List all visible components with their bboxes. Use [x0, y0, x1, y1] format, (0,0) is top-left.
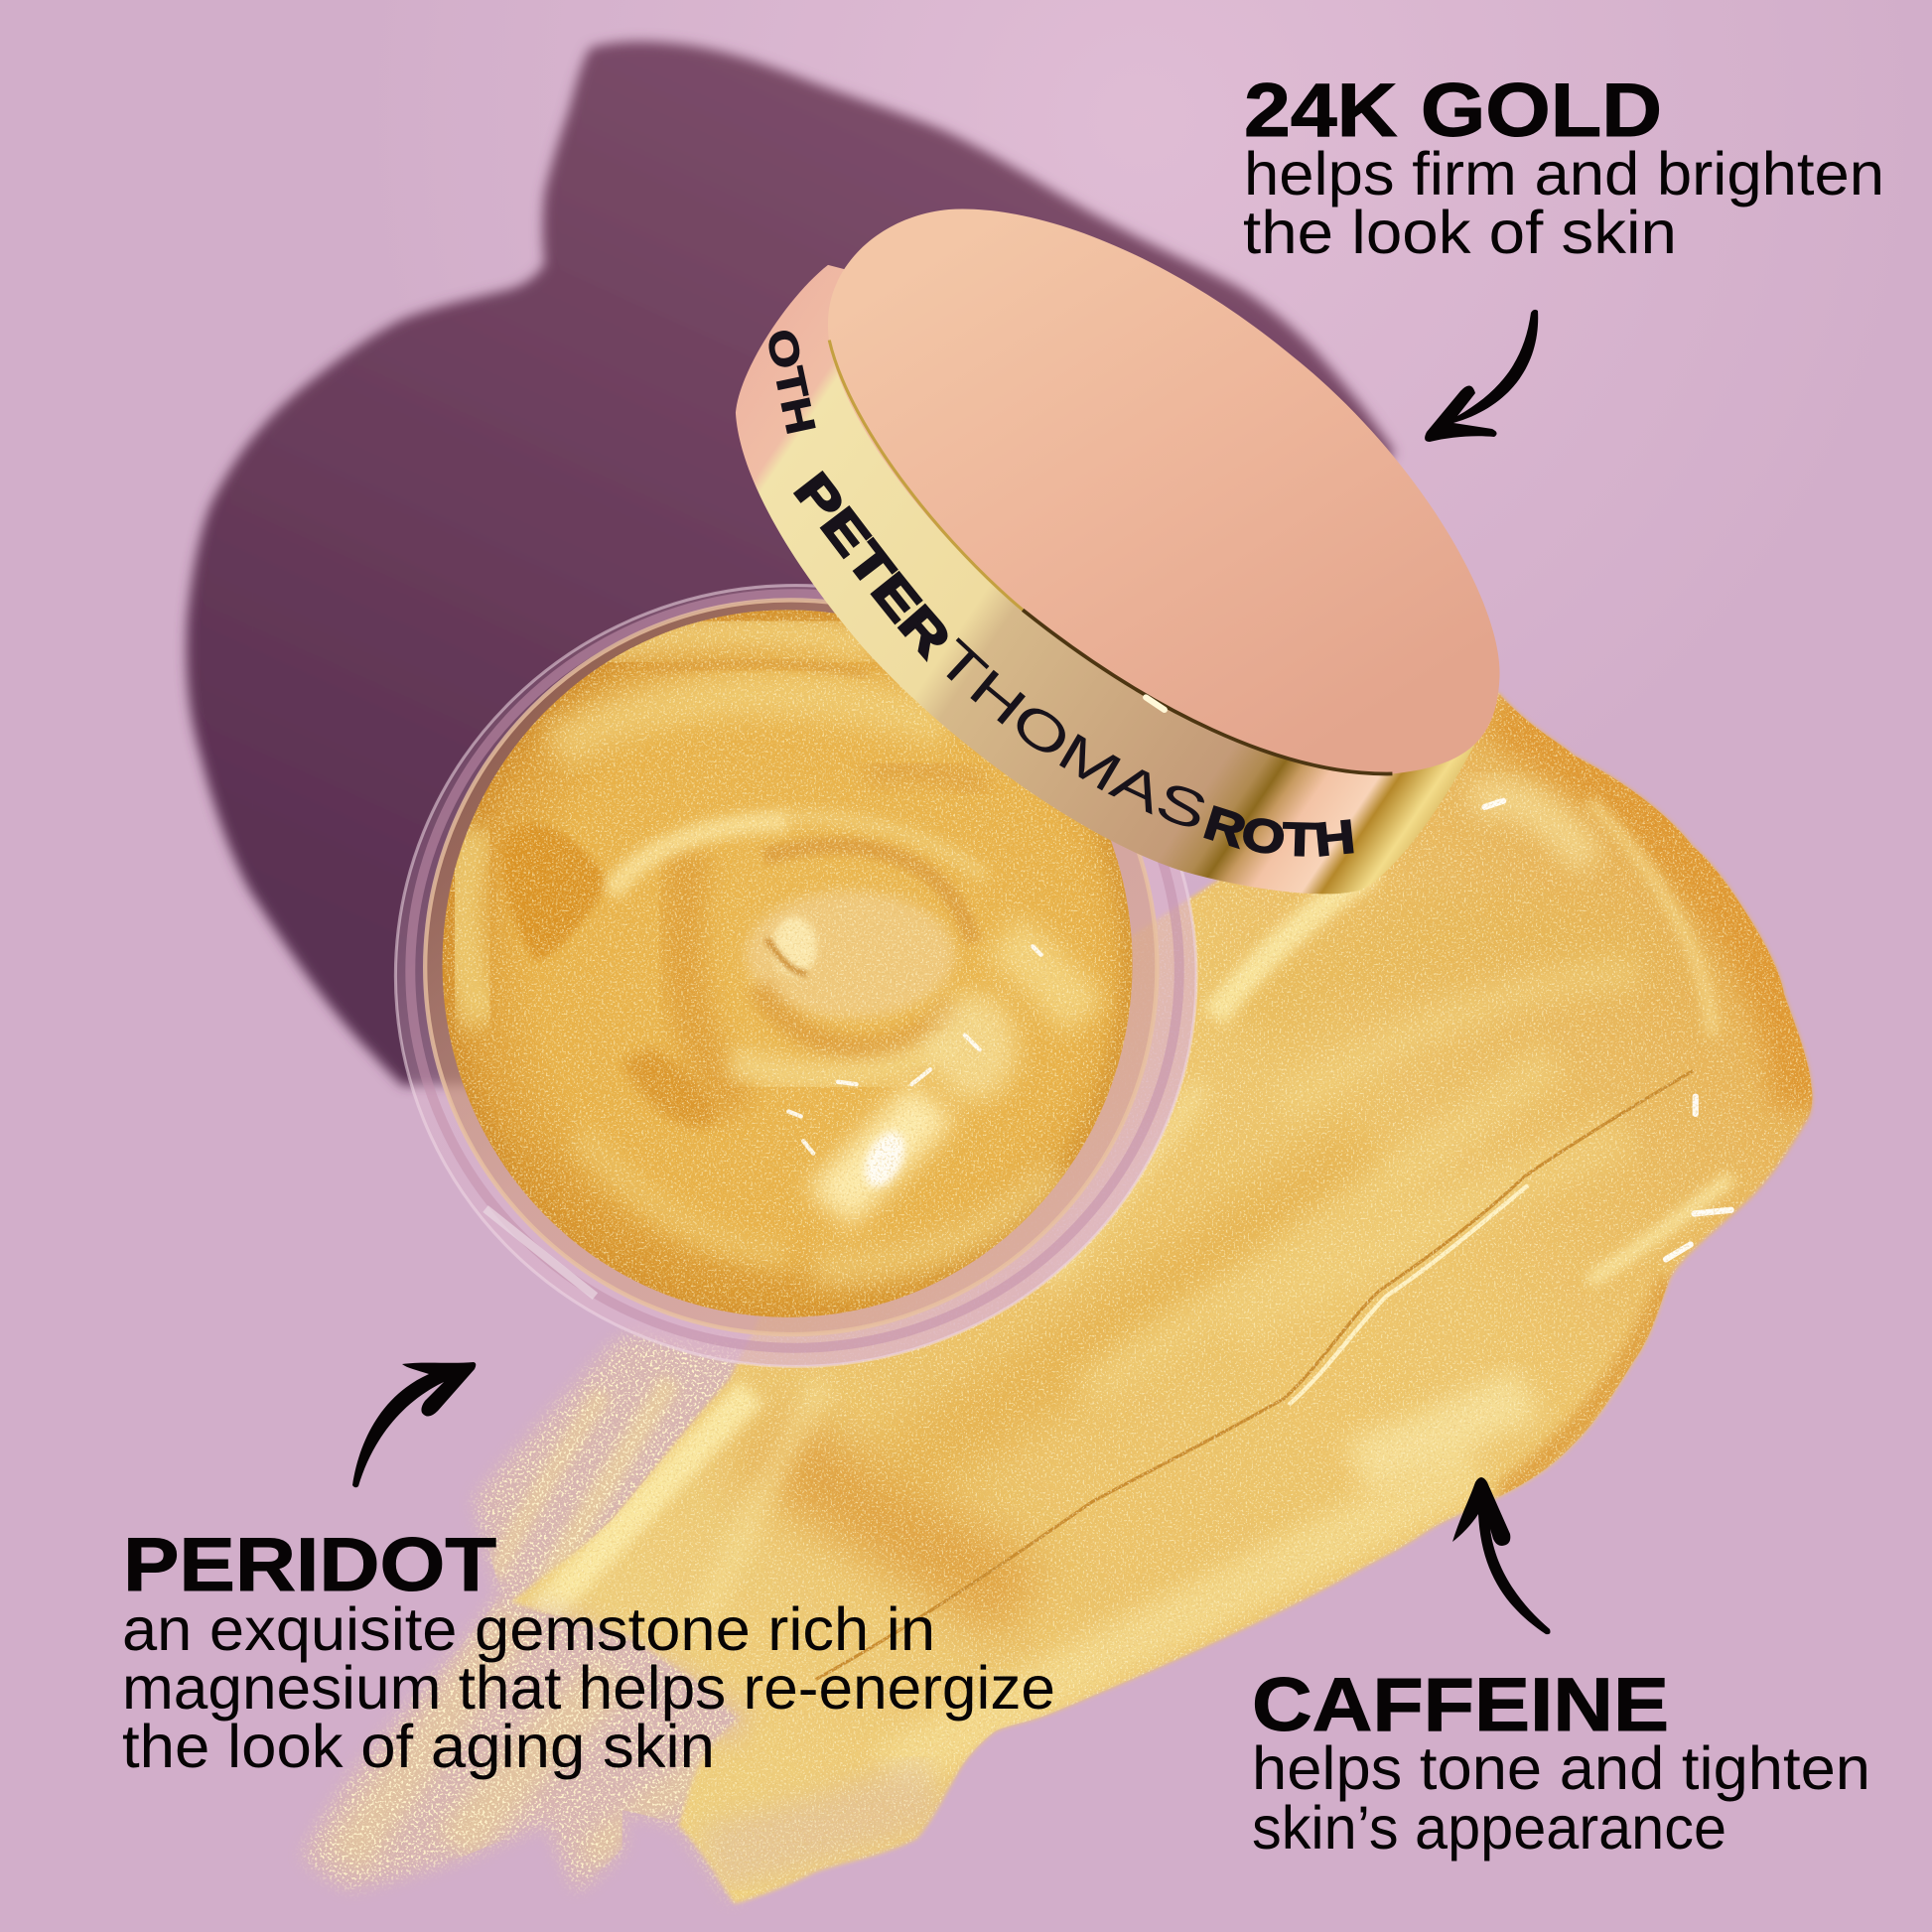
- callout: caffeine: [1252, 1663, 1870, 1862]
- arrow: peridot to jar: [352, 1362, 476, 1487]
- cast shadow of jar and lid: [187, 42, 1395, 1085]
- text: caffeine description: [1252, 1734, 1870, 1862]
- smear: solid gold body: [511, 692, 1812, 1903]
- text: peridot description: magnesium that helps re-energize: [122, 1654, 1055, 1722]
- callout: 24K gold: [1243, 69, 1884, 266]
- lid: peach top face: [828, 209, 1500, 773]
- lid: brand lettering: ROTH: [1203, 805, 1354, 857]
- lid: brand lettering: THOMAS: [947, 637, 1204, 826]
- heading: PERIDOT: PERIDOT: [123, 1523, 496, 1607]
- text: 24K gold description: the look of skin: [1243, 199, 1677, 266]
- text: peridot description: an exquisite gemstone rich in: [122, 1595, 935, 1663]
- arrow: caffeine to smear: [1452, 1477, 1551, 1634]
- gold smear swatch: [303, 692, 1812, 1903]
- lid: metallic side band: [736, 265, 1498, 894]
- smear: sheer sparkling tail: [303, 1335, 788, 1903]
- jar: [395, 586, 1196, 1366]
- jar: gold gel with swirl: [443, 610, 1133, 1317]
- heading: CAFFEINE: CAFFEINE: [1252, 1663, 1669, 1747]
- lid: brand lettering: [768, 288, 1398, 857]
- text: caffeine description: skin’s appearance: [1252, 1794, 1726, 1862]
- text: peridot description: [122, 1595, 1055, 1780]
- text: 24K gold description: [1243, 140, 1884, 266]
- lid: brand lettering: OTH: [758, 325, 824, 438]
- lid: [735, 208, 1499, 894]
- callout: peridot: [122, 1523, 1055, 1780]
- jar: clear outer wall: [395, 586, 1196, 1366]
- text: peridot description: the look of aging skin: [122, 1713, 715, 1780]
- text: 24K gold description: helps firm and brighten: [1244, 140, 1884, 207]
- heading: 24K GOLD: 24K GOLD: [1244, 69, 1662, 153]
- arrow: 24K gold to lid: [1425, 310, 1538, 442]
- lid: brand lettering: PETER: [792, 471, 947, 662]
- text: caffeine description: helps tone and tighten: [1252, 1734, 1870, 1802]
